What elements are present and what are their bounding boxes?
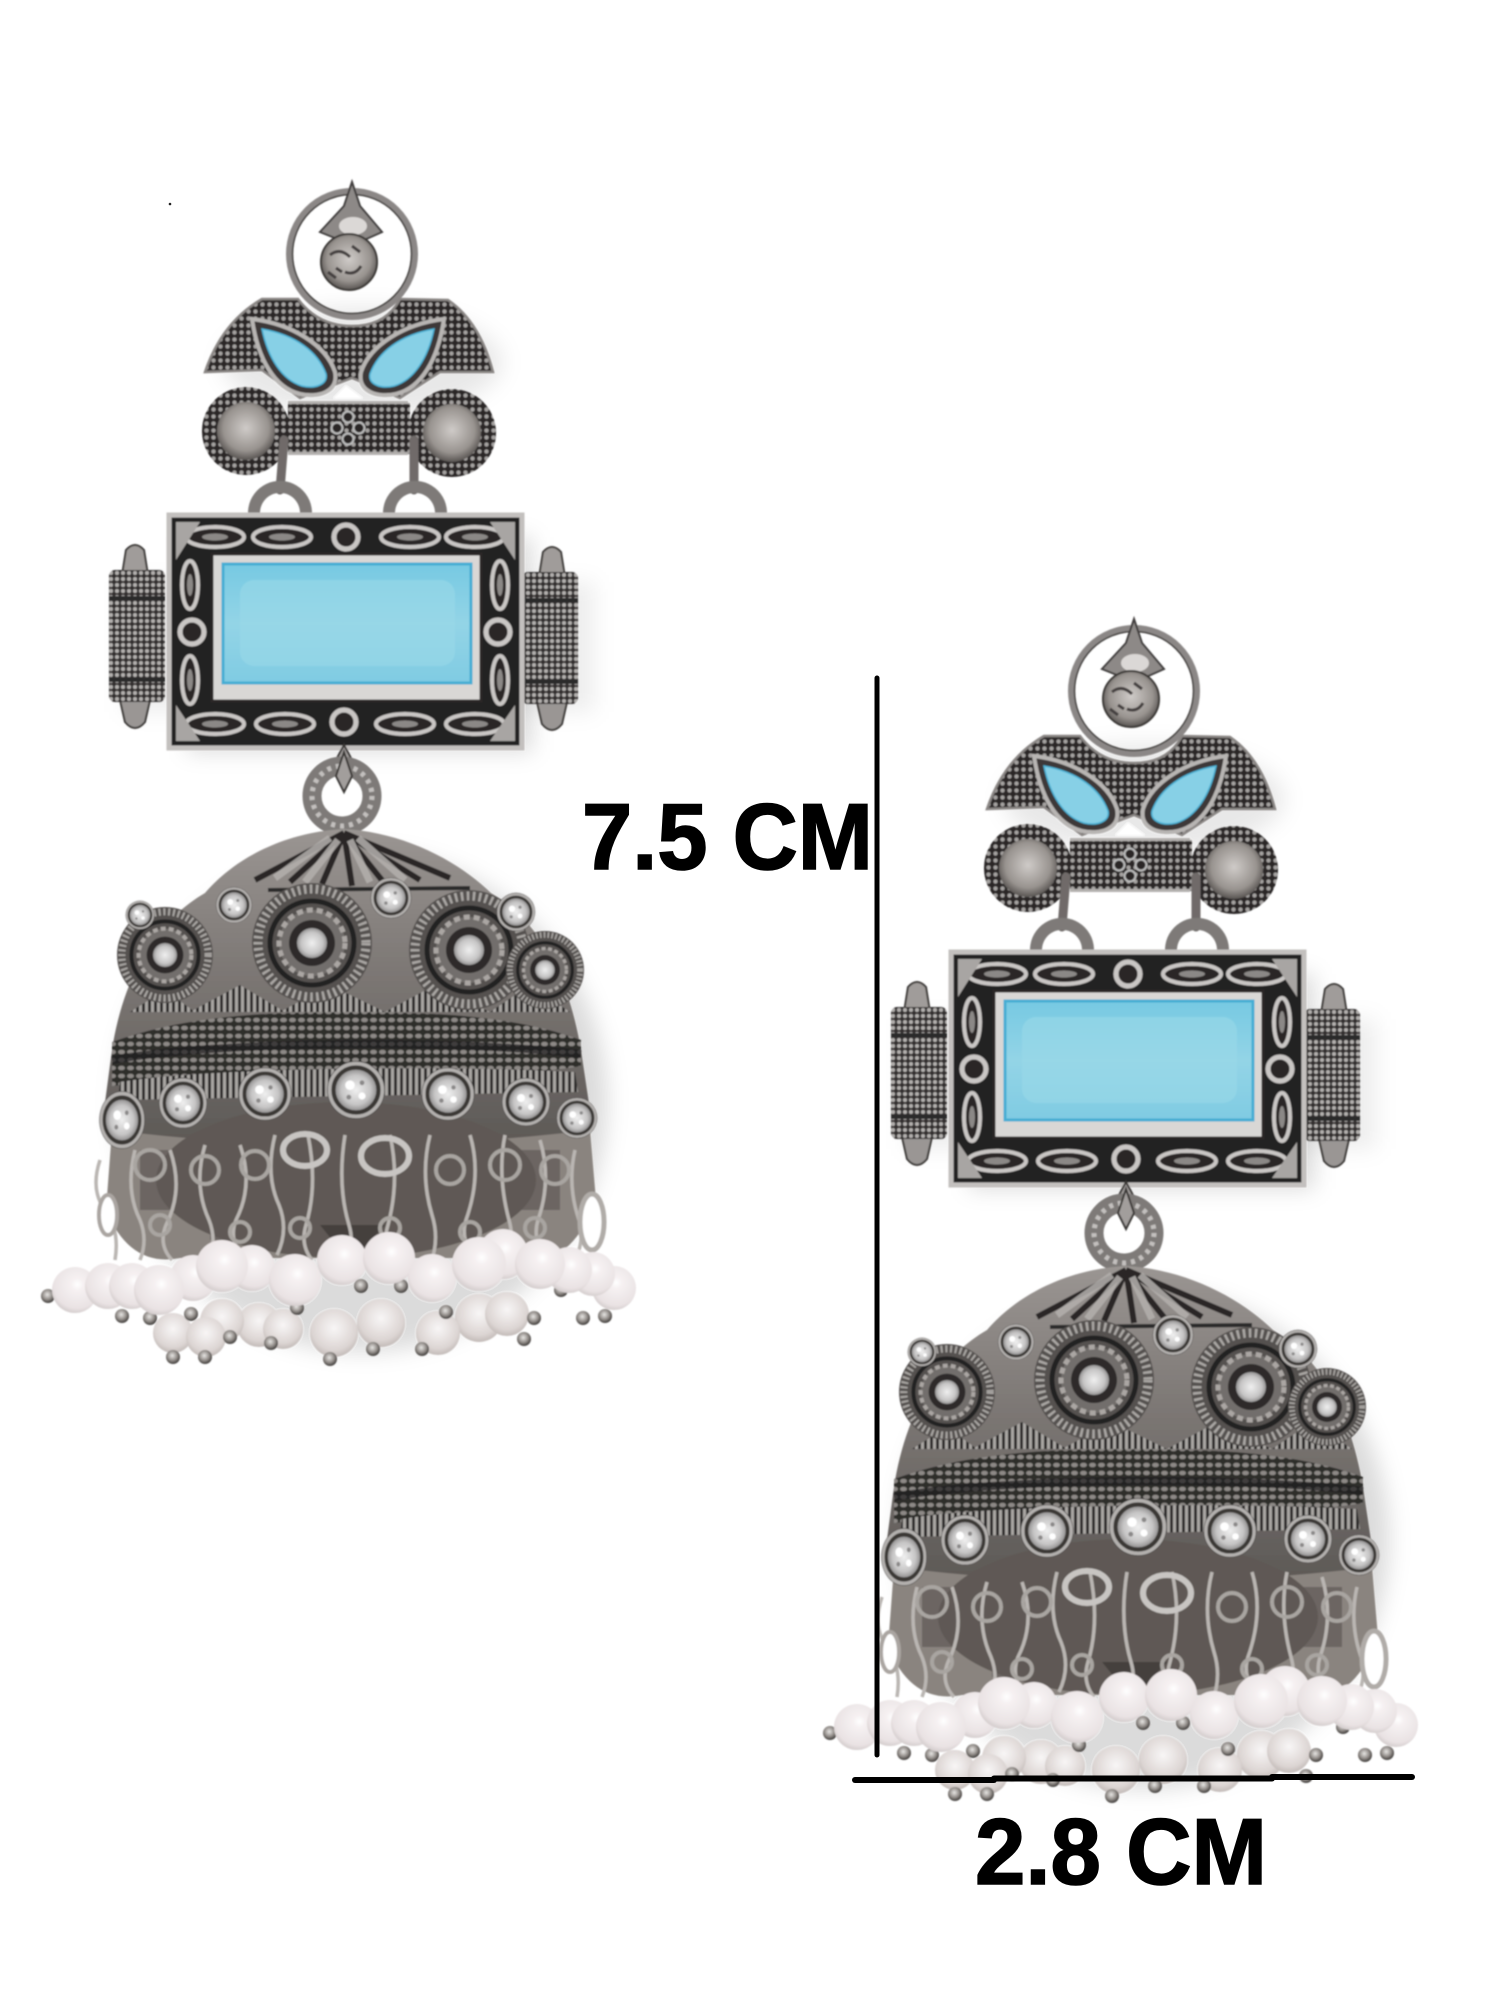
rectangular frame with blue stone — [951, 952, 1304, 1213]
crystal stone row — [881, 1498, 1379, 1586]
width label: 2.8 CM — [975, 1799, 1267, 1904]
right side tube — [1304, 984, 1360, 1167]
pearl fringe — [41, 1229, 636, 1366]
left side tube — [891, 982, 947, 1165]
left side tube — [109, 545, 165, 728]
right side tube — [522, 547, 578, 730]
jhumka dome — [104, 829, 591, 1159]
pearl fringe — [823, 1666, 1418, 1803]
height label: 7.5 CM — [582, 784, 873, 889]
width measurement line — [855, 1777, 1412, 1780]
height measurement line — [874, 678, 880, 1755]
stud ring — [1071, 619, 1197, 754]
crystal stone row — [99, 1061, 597, 1149]
jhumka dome — [886, 1266, 1373, 1596]
fan with blue teardrop stones — [987, 736, 1275, 835]
connecting ring — [1094, 1189, 1154, 1263]
link bar with silver balls — [984, 824, 1278, 957]
chains — [878, 1539, 1386, 1702]
stud ring — [289, 182, 415, 317]
earring: left — [41, 182, 636, 1366]
speck — [169, 203, 171, 205]
connecting ring — [312, 752, 372, 826]
fan with blue teardrop stones — [205, 299, 493, 398]
rectangular frame with blue stone — [169, 515, 522, 776]
earring: right — [823, 619, 1418, 1803]
link bar with silver balls — [202, 387, 496, 520]
chains — [96, 1102, 604, 1265]
